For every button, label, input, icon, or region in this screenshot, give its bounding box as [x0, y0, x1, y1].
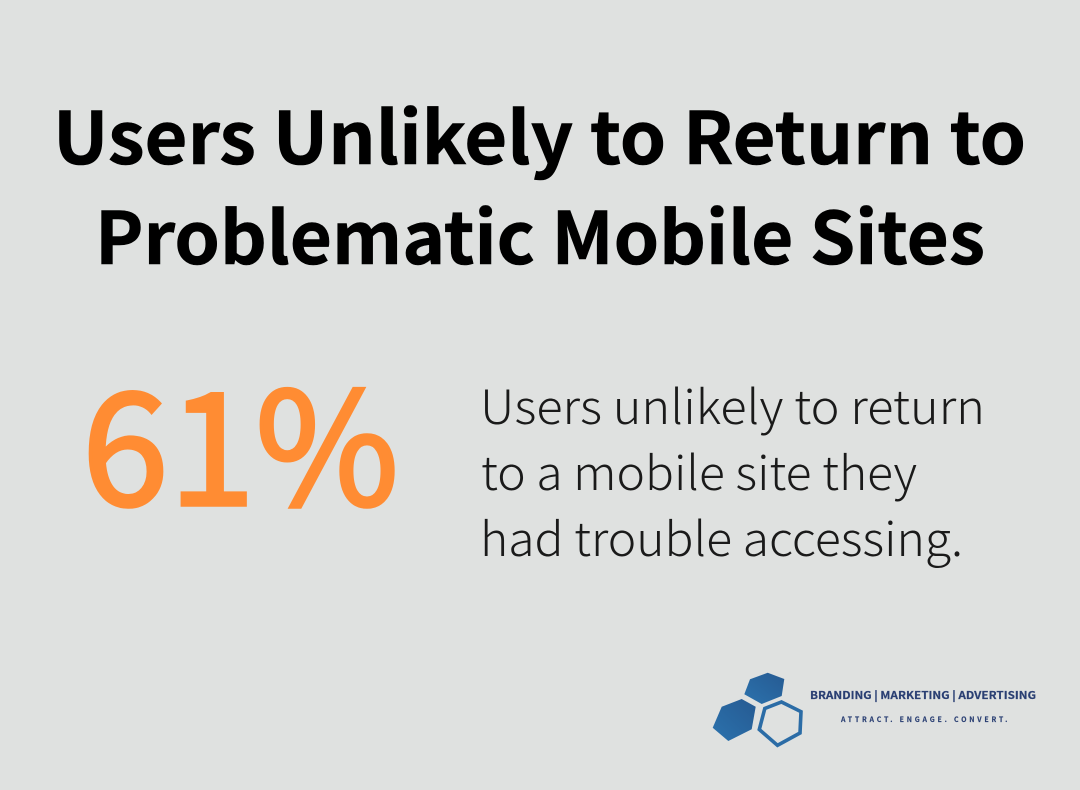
title: Problematic Mobile Sites — [95, 180, 985, 285]
icon: outlined hexagon — [759, 702, 801, 745]
logo tagline: services: BRANDING | MARKETING | ADVERTISING — [810, 688, 1036, 703]
statistic description: to a mobile site they — [481, 435, 917, 504]
big statistic: 61%: 61% — [82, 324, 399, 550]
logo — [713, 673, 1036, 745]
statistic description: Users unlikely to return — [480, 369, 985, 438]
icon: top filled hexagon — [744, 673, 784, 704]
logo tagline: motto: ATTRACT. ENGAGE. CONVERT. — [840, 715, 1010, 725]
title: Users Unlikely to Return to — [53, 80, 1026, 185]
statistic description — [480, 369, 985, 570]
statistic description: had trouble accessing. — [480, 501, 963, 570]
title — [53, 80, 1026, 285]
icon: left filled hexagon — [713, 699, 756, 741]
